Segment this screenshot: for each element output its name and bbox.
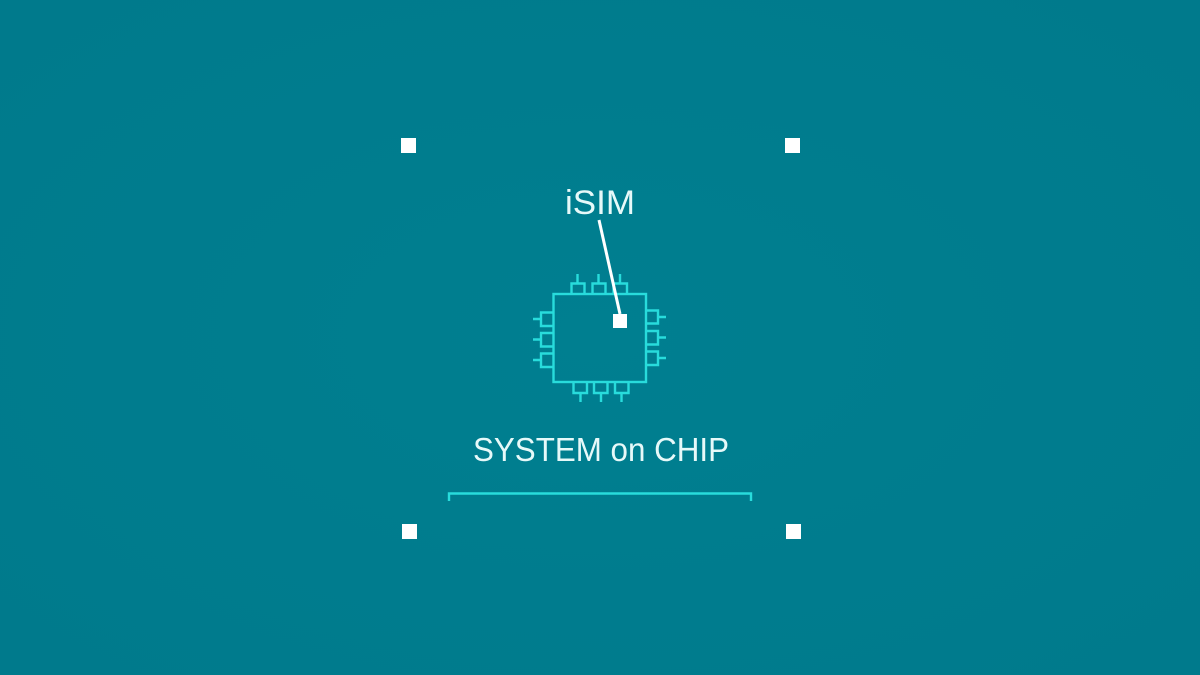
label: iSIM: iSIM bbox=[565, 184, 635, 222]
corner markers bbox=[401, 138, 801, 539]
pointer line from iSIM to chip bbox=[599, 220, 620, 314]
top pins bbox=[572, 274, 627, 294]
label: SYSTEM on CHIP: SYSTEM on CHIP bbox=[473, 431, 729, 468]
bracket bbox=[449, 494, 751, 501]
right pins bbox=[646, 310, 666, 365]
bottom pins bbox=[574, 382, 628, 402]
chip body bbox=[554, 294, 646, 382]
iSIM marker on chip bbox=[613, 314, 627, 328]
left pins bbox=[533, 312, 553, 367]
icon: chip bbox=[533, 274, 666, 402]
